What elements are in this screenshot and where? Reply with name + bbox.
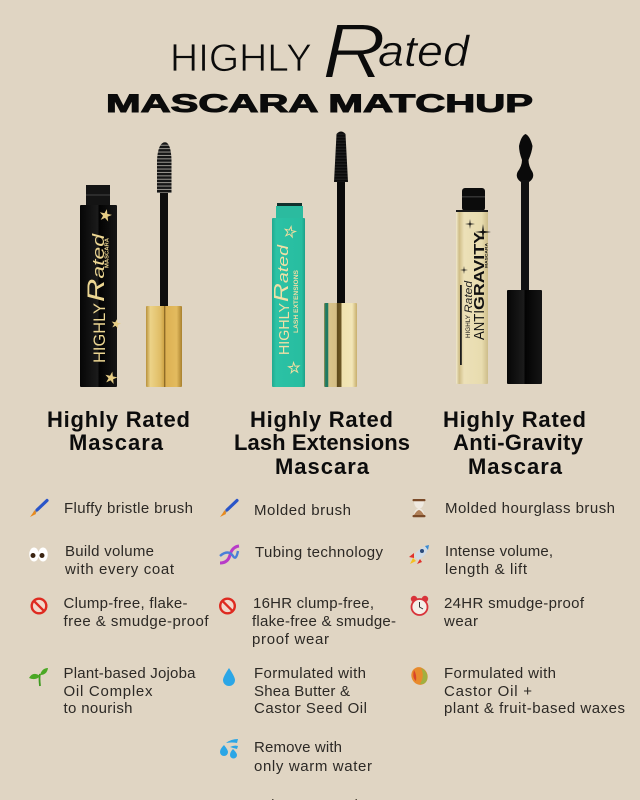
text: molded hourglass brush: Molded hourglass brush bbox=[445, 500, 615, 517]
text: build volume: with every coat bbox=[64, 561, 175, 578]
tube: MASCARA bbox=[104, 238, 110, 268]
product name: Highly Rated Lash Extensions Mascara bbox=[234, 407, 410, 479]
product: Highly Rated Lash Extensions Mascara bbox=[271, 132, 357, 387]
text: formulated with shea butter: Shea Butter & bbox=[254, 683, 350, 700]
text: remove with warm water: only warm water bbox=[254, 758, 372, 775]
text: formulated with shea butter: Formulated with bbox=[254, 665, 366, 682]
tube: Rated bbox=[83, 233, 110, 302]
product name: Highly Rated Lash Extensions Mascara: Lash Extensions bbox=[234, 430, 410, 455]
text: formulated with castor oil: Castor Oil + bbox=[444, 683, 532, 700]
icon: water splash bbox=[220, 739, 238, 758]
text: formulated with castor oil: plant & fruit-based waxes bbox=[444, 700, 625, 717]
icon: paintbrush bbox=[30, 500, 47, 517]
text: plant-based: to nourish bbox=[64, 700, 132, 717]
icon: prohibited bbox=[32, 599, 46, 613]
tube bbox=[271, 203, 305, 387]
text: 16HR clump-free: 16HR clump-free, bbox=[253, 595, 374, 612]
text: intense volume bbox=[445, 543, 553, 578]
text: clump-free: free & smudge-proof bbox=[64, 613, 209, 630]
title line: Highly Rated: R bbox=[322, 7, 386, 95]
product name: Highly Rated Anti-Gravity Mascara: Highly Rated bbox=[443, 407, 586, 432]
text: plant-based bbox=[64, 665, 196, 717]
product name: Highly Rated Mascara: Highly Rated bbox=[47, 407, 190, 432]
tube: MASCARA bbox=[484, 242, 488, 268]
product name: Highly Rated Lash Extensions Mascara: Highly Rated bbox=[250, 407, 393, 432]
tube: ANTI bbox=[471, 310, 488, 340]
title line: Mascara Matchup: MASCARA MATCHUP bbox=[106, 90, 533, 118]
feature list: Anti-Gravity Mascara bbox=[408, 499, 625, 717]
text: fluffy bristle brush: Fluffy bristle brush bbox=[64, 500, 193, 517]
text: tubing technology: Tubing technology bbox=[255, 544, 384, 561]
product name: Highly Rated Anti-Gravity Mascara bbox=[443, 407, 586, 479]
feature list: Lash Extensions Mascara bbox=[220, 500, 396, 775]
icon: alarm clock bbox=[411, 596, 428, 615]
text: 16HR clump-free: proof wear bbox=[252, 631, 329, 648]
tube: HIGHLY bbox=[465, 314, 472, 338]
feature list: Highly Rated Mascara bbox=[29, 500, 209, 717]
text: remove with warm water: Remove with bbox=[254, 739, 342, 756]
icon: droplet bbox=[223, 668, 235, 686]
tube: Rated bbox=[271, 244, 293, 302]
text: formulated with shea butter bbox=[254, 665, 367, 717]
text: molded brush: Molded brush bbox=[254, 502, 351, 519]
tube: HIGHLY bbox=[91, 303, 109, 363]
text: 16HR clump-free: flake-free & smudge- bbox=[252, 613, 396, 630]
tube bbox=[456, 188, 491, 384]
text: intense volume: length & lift bbox=[445, 561, 528, 578]
product: Highly Rated Mascara bbox=[80, 142, 182, 387]
product name: Highly Rated Mascara bbox=[47, 407, 190, 455]
title line: Highly Rated: HIGHLY bbox=[170, 37, 312, 80]
tube: LASH EXTENSIONS bbox=[294, 270, 300, 333]
wand bbox=[507, 134, 542, 384]
product name: Highly Rated Anti-Gravity Mascara: Mascara bbox=[468, 454, 563, 479]
wand bbox=[324, 132, 357, 387]
text: 24HR smudge-proof: 24HR smudge-proof bbox=[444, 595, 585, 612]
icon: mango bbox=[408, 664, 431, 688]
icon: seedling bbox=[29, 668, 48, 686]
text: formulated with castor oil bbox=[444, 665, 625, 717]
text: formulated with shea butter: Castor Seed Oil bbox=[254, 700, 367, 717]
product name: Highly Rated Mascara: Mascara bbox=[69, 430, 164, 455]
text: clump-free: Clump-free, flake- bbox=[64, 595, 188, 612]
wand bbox=[146, 142, 182, 387]
product name: Highly Rated Lash Extensions Mascara: Mascara bbox=[275, 454, 370, 479]
text: 24HR smudge-proof: wear bbox=[443, 613, 478, 630]
text: formulated with castor oil: Formulated with bbox=[444, 665, 556, 682]
tube: Rated bbox=[463, 280, 475, 313]
text: plant-based: Plant-based Jojoba bbox=[64, 665, 196, 682]
text: plant-based: Oil Complex bbox=[64, 683, 153, 700]
text: intense volume: Intense volume, bbox=[445, 543, 553, 560]
tube: HIGHLY bbox=[276, 303, 293, 355]
title bbox=[106, 7, 533, 118]
text: remove with warm water bbox=[254, 739, 372, 775]
title line: Highly Rated: ated bbox=[378, 27, 471, 76]
icon: paintbrush bbox=[220, 500, 237, 517]
text: clump-free bbox=[64, 595, 209, 630]
product: Highly Rated Anti-Gravity Mascara bbox=[456, 134, 542, 384]
icon: hourglass bbox=[412, 499, 426, 517]
text: build volume: Build volume bbox=[65, 543, 154, 560]
text: 24HR smudge-proof bbox=[443, 595, 585, 630]
icon: prohibited bbox=[220, 599, 235, 613]
icon: rocket bbox=[409, 545, 429, 564]
text: 16HR clump-free bbox=[252, 595, 396, 648]
icon: eyes bbox=[29, 548, 48, 562]
tube: GRAVITY bbox=[471, 232, 488, 310]
text: build volume bbox=[64, 543, 175, 578]
product name: Highly Rated Anti-Gravity Mascara: Anti-Gravity bbox=[453, 430, 584, 455]
icon: DNA bbox=[220, 546, 239, 563]
tube bbox=[80, 185, 122, 387]
title line: Highly Rated bbox=[170, 7, 471, 95]
